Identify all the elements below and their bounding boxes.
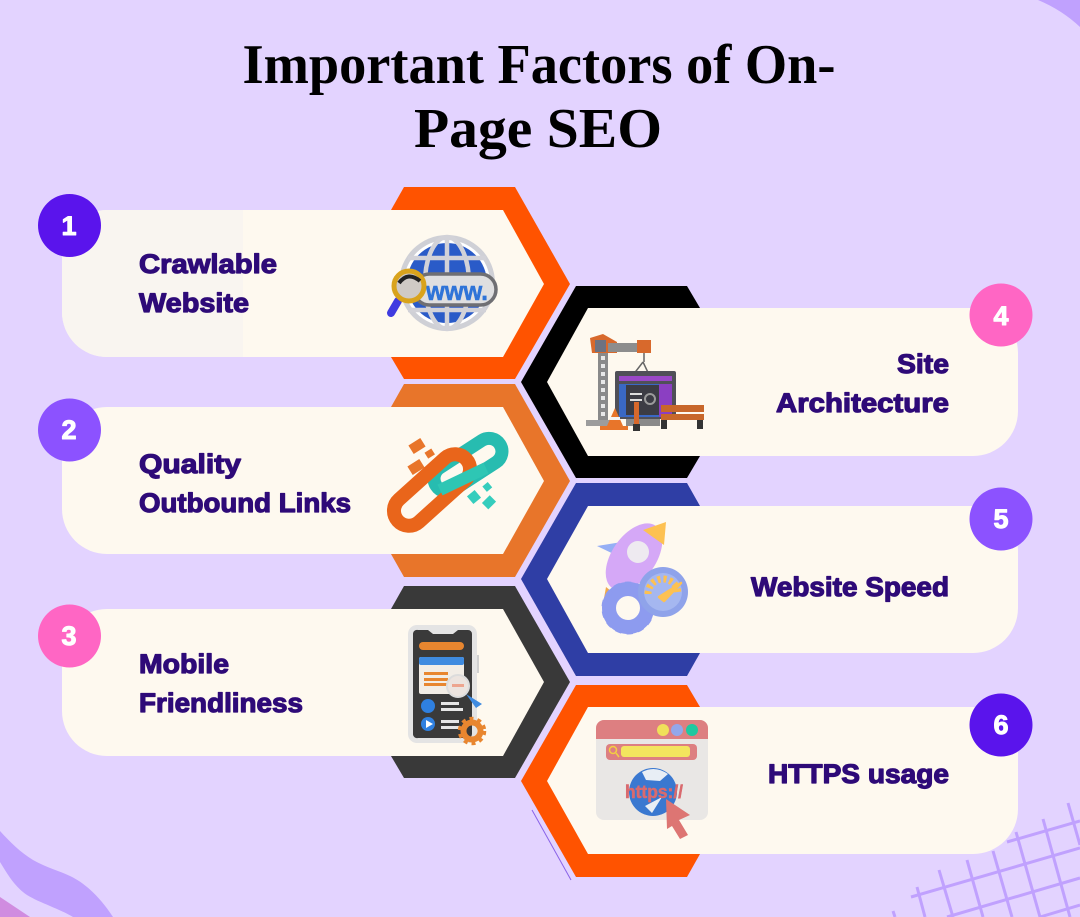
icon: crane over website [586,334,704,431]
panel: 6 HTTPS usage [521,685,1032,877]
icon: rocket, gear and speedometer [594,513,688,632]
text: HTTPS usage: HTTPS usage [768,759,949,789]
title: Page SEO [414,98,662,160]
panel: 4 Site Architecture [521,284,1032,478]
text: Quality Outbound Links: Outbound Links [139,488,351,518]
badge 2: 2 [61,415,77,445]
text: Crawlable Website: Crawlable [139,249,277,279]
text: Site Architecture: Architecture [776,388,949,418]
text: Crawlable Website: Website [139,288,249,318]
badge 4: 4 [993,301,1009,331]
badge 3 [38,604,101,668]
icon: browser with https globe and cursor [596,720,708,839]
text: Site Architecture [776,349,949,418]
text: Mobile Friendliness [139,649,303,718]
title: Important Factors of On- [242,34,836,96]
text: Website Speed: Website Speed [751,572,949,602]
icon: www globe with magnifier [391,235,496,331]
text: Quality Outbound Links [139,449,351,518]
panel: 3 Mobile Friendliness [38,586,570,778]
text: Quality Outbound Links: Quality [139,449,241,479]
icon: www globe with magnifier: www. [425,276,488,306]
badge 5 [970,488,1032,550]
badge 5: 5 [993,504,1009,534]
icon: chain links [388,433,507,532]
badge 6: 6 [993,710,1009,740]
icon: mobile phone [408,625,484,744]
badge 1: 1 [61,211,77,241]
badge 1 [38,194,101,257]
badge 6 [970,694,1032,756]
text: Mobile Friendliness: Friendliness [139,688,303,718]
panel: 2 Quality Outbound Links [38,384,570,577]
text: Crawlable Website [139,249,277,318]
icon: browser with https globe and cursor: https:// [625,782,683,802]
badge 2 [38,398,101,462]
panel: 5 Website Speed [521,483,1032,676]
title [242,34,836,160]
badge 3: 3 [61,621,77,651]
badge 4 [970,284,1032,346]
text: Mobile Friendliness: Mobile [139,649,229,679]
panel: 1 Crawlable Website [38,187,570,379]
text: Site Architecture: Site [897,349,949,379]
